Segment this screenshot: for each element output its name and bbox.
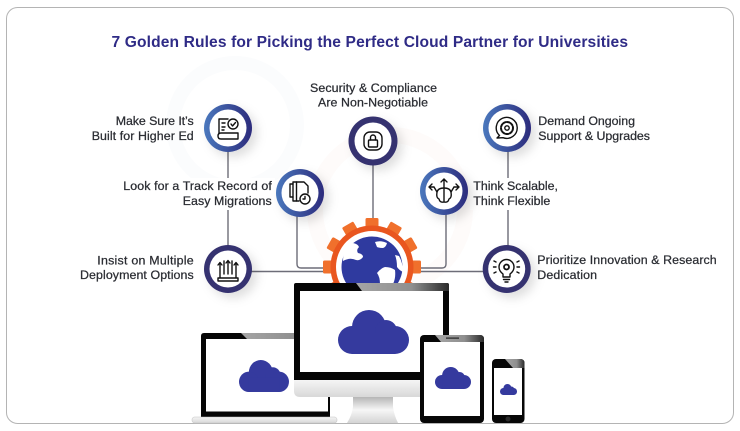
- label: security: Security & Compliance: [310, 81, 437, 95]
- connector lines: [228, 150, 508, 272]
- label: support: Demand Ongoing: [538, 114, 635, 128]
- label: track record: Look for a Track Record of: [123, 179, 272, 193]
- node: built for higher ed: [92, 104, 252, 152]
- icon: deployment arrows: [218, 260, 238, 281]
- node: support: [483, 104, 650, 152]
- label: deployment options: [80, 253, 194, 282]
- label: track record: Easy Migrations: [183, 194, 272, 208]
- icon: checklist book: [218, 119, 238, 139]
- label: security: Are Non-Negotiable: [318, 96, 428, 110]
- label: innovation: [537, 253, 717, 282]
- icon: padlock: [364, 132, 382, 150]
- icon: light bulb: [494, 260, 520, 282]
- label: deployment options: Insist on Multiple: [97, 253, 194, 267]
- label: scalable: Think Flexible: [473, 194, 550, 208]
- label: track record: [123, 179, 272, 208]
- label: built for higher ed: [92, 114, 194, 143]
- label: security: [310, 81, 437, 110]
- tablet cloud: [435, 367, 471, 389]
- label: innovation: Prioritize Innovation & Research: [537, 253, 717, 267]
- label backgrounds: [120, 178, 560, 210]
- desktop monitor: [294, 283, 449, 423]
- label: built for higher ed: Make Sure It’s: [116, 114, 194, 128]
- node: track record: [123, 169, 324, 217]
- title: 7 Golden Rules for Picking the Perfect Cloud Partner for Universities: [112, 34, 628, 51]
- label: scalable: Think Scalable,: [473, 179, 558, 193]
- icon: migration documents: [290, 182, 310, 204]
- phone cloud: [500, 384, 517, 395]
- label: innovation: Dedication: [537, 268, 597, 282]
- icon: brain with arrows: [429, 179, 459, 202]
- node: scalable: [420, 167, 558, 215]
- label: support: [538, 114, 650, 143]
- tablet: [420, 335, 484, 423]
- laptop cloud: [239, 360, 289, 392]
- gear and globe: [323, 218, 421, 308]
- label: scalable: [473, 179, 558, 208]
- label: built for higher ed: Built for Higher Ed: [92, 129, 194, 143]
- label: support: Support & Upgrades: [538, 129, 650, 143]
- icon: support gear bubble: [496, 117, 517, 138]
- node: deployment options: [80, 245, 252, 293]
- monitor cloud: [338, 310, 409, 354]
- phone: [492, 359, 524, 423]
- node: security: [310, 81, 437, 166]
- label: deployment options: Deployment Options: [80, 268, 194, 282]
- background watermark: [173, 63, 465, 285]
- laptop: [192, 333, 337, 423]
- node: innovation: [483, 245, 717, 293]
